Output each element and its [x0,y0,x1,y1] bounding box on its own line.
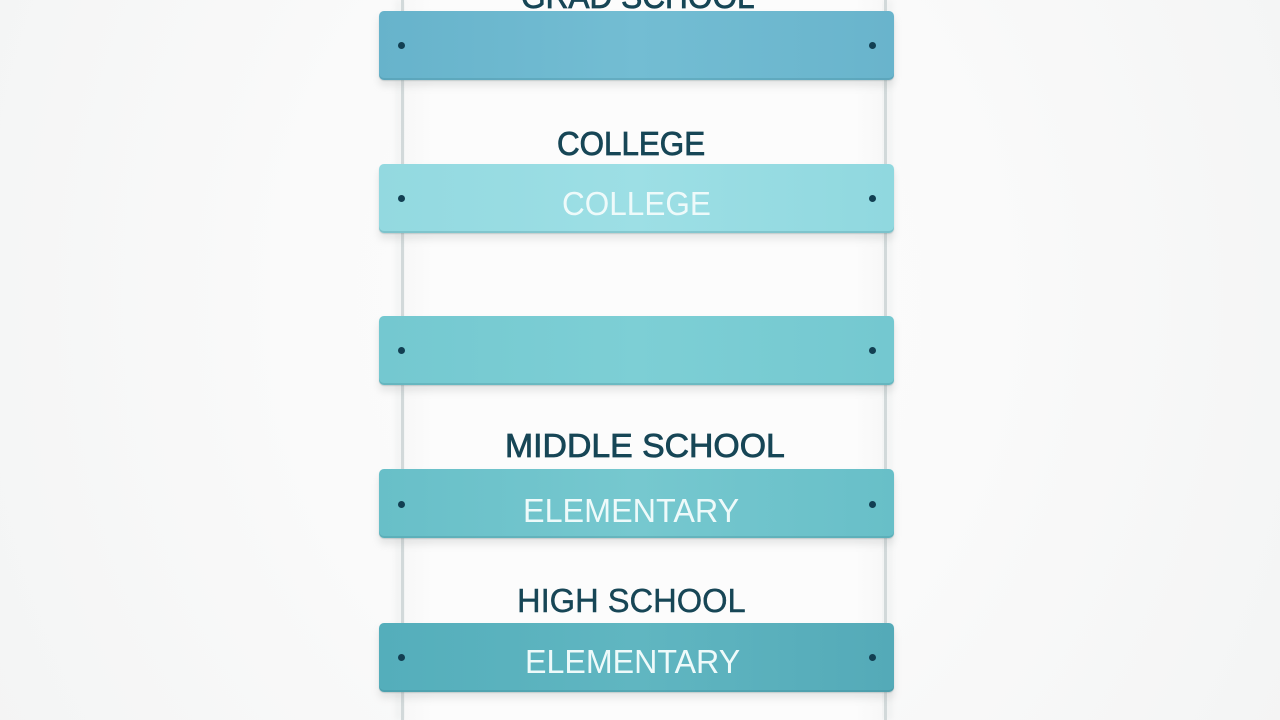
rung: high school [379,623,894,692]
right rail [884,0,887,720]
right bolt [869,195,876,202]
right bolt [869,500,876,508]
heading: high school: HIGH SCHOOL [517,582,746,619]
rung: grad school [379,11,894,80]
right bolt [869,347,876,354]
rung: college [379,164,894,233]
left bolt [398,195,405,202]
rung label: ELEMENTARY [525,643,740,680]
left rail [401,0,404,720]
panel: ladder interior [405,0,882,720]
rung: middle school [379,469,894,538]
left bolt [398,500,405,508]
rung label: COLLEGE [562,185,711,222]
right bolt [869,654,876,661]
rung label: ELEMENTARY [523,492,739,529]
right bolt [869,42,876,49]
rung: blank middle [379,316,894,385]
left bolt [398,42,405,49]
ladder [401,0,887,720]
left bolt [398,347,405,354]
heading: middle school: MIDDLE SCHOOL [505,427,785,464]
left bolt [398,654,405,661]
heading: college: COLLEGE [557,125,705,162]
